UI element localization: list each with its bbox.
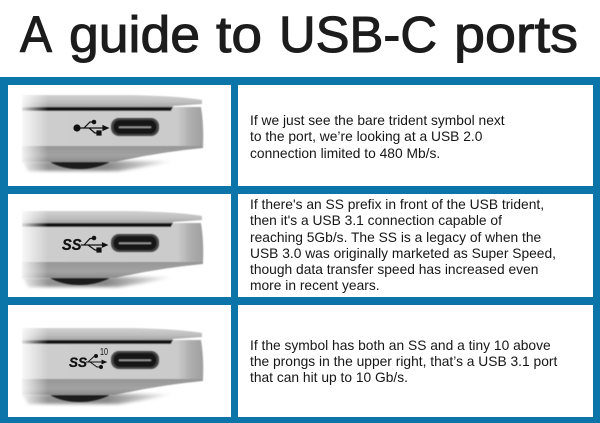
panel: row 1 text <box>238 85 593 186</box>
text: row 2: reaching 5Gb/s. The SS is a legacy of when the <box>250 230 541 245</box>
text: row 3: If the symbol has both an SS and a tiny 10 above <box>250 338 551 352</box>
panel: row 3 text <box>238 305 593 417</box>
text: row 1: If we just see the bare trident symbol next <box>250 113 505 128</box>
text: row 2: though data transfer speed has increased even <box>250 262 538 277</box>
text: row 2: USB 3.0 was originally marketed as Super Speed, <box>250 246 556 261</box>
icon: SS USB symbol: SS <box>62 237 82 254</box>
text: row 2: If there's an SS prefix in front of the USB trident, <box>250 197 544 212</box>
text: row 1 <box>250 113 505 161</box>
title: ports <box>454 6 578 63</box>
panel: row 2 image <box>8 194 231 297</box>
title: A <box>20 6 52 63</box>
panel: row 1 image <box>8 85 231 186</box>
text: row 2: then it's a USB 3.1 connection capable of <box>250 213 502 228</box>
text: row 2: more in recent years. <box>250 278 380 293</box>
panel: row 2 text <box>238 194 593 297</box>
text: row 3: that can hit up to 10 Gb/s. <box>250 370 408 385</box>
text: row 3 <box>250 338 558 385</box>
text: row 3: the prongs in the upper right, that’s a USB 3.1 port <box>250 354 557 369</box>
title <box>19 6 578 63</box>
text: row 2 <box>250 197 556 293</box>
icon: SS USB symbol <box>62 236 107 254</box>
title: to <box>216 6 262 63</box>
icon: SS 10 USB symbol: SS <box>69 354 88 370</box>
laptop row 3 <box>18 323 203 407</box>
panel: row 3 image <box>8 305 231 417</box>
title: guide <box>69 6 200 63</box>
icon: SS 10 USB symbol: 10 <box>100 347 108 358</box>
icon: USB trident <box>74 120 108 135</box>
icon: SS 10 USB symbol <box>69 347 108 370</box>
text: row 1: connection limited to 480 Mb/s. <box>250 146 440 161</box>
title: USB-C <box>279 6 437 63</box>
text: row 1: to the port, we’re looking at a USB 2.0 <box>250 129 482 144</box>
laptop row 2 <box>18 206 203 290</box>
laptop row 1 <box>18 90 203 174</box>
